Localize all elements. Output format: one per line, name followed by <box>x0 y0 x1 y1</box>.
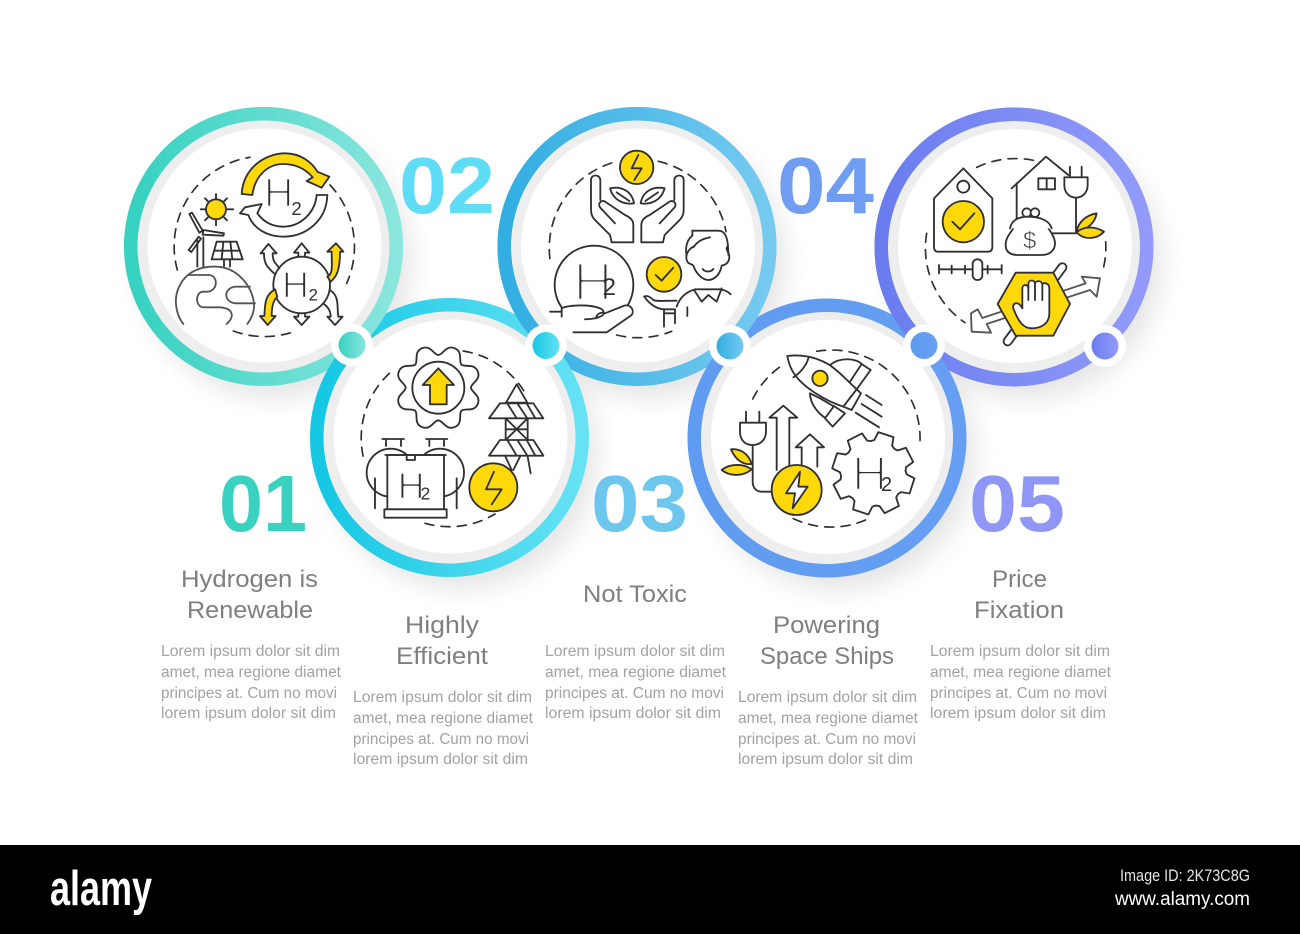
title: Powering Space Ships: Space Ships <box>760 643 894 670</box>
footer bar <box>0 845 1300 934</box>
number 02: 02 <box>399 141 495 230</box>
icon: renewable hydrogen <box>174 153 354 337</box>
text block 4: lorem ipsum dolor sit dim <box>738 751 913 768</box>
icon: price fixation <box>925 157 1106 341</box>
icon: renewable hydrogen: 2 <box>291 198 302 219</box>
text block 5: lorem ipsum dolor sit dim <box>930 705 1106 722</box>
title: Hydrogen is Renewable <box>181 566 318 624</box>
title: Highly Efficient <box>396 612 488 670</box>
icon: highly efficient <box>361 343 543 527</box>
text block 1: lorem ipsum dolor sit dim <box>161 705 336 722</box>
icon: not toxic: 2 <box>603 274 616 301</box>
icon: powering space ships: 2 <box>881 474 892 496</box>
text block 5: principes at. Cum no movi <box>930 685 1107 702</box>
text block 2: principes at. Cum no movi <box>353 731 529 748</box>
title: Powering Space Ships: Powering <box>773 612 880 639</box>
number 03: 03 <box>591 459 688 548</box>
text block 3: lorem ipsum dolor sit dim <box>545 705 721 722</box>
icon: not toxic <box>549 151 731 338</box>
footer logo: alamy <box>50 862 152 916</box>
text block 2: lorem ipsum dolor sit dim <box>353 751 528 768</box>
title: Hydrogen is Renewable: Hydrogen is <box>181 566 318 593</box>
icon: powering space ships <box>722 350 920 527</box>
icon: renewable hydrogen: H <box>264 170 293 216</box>
text block 5: amet, mea regione diamet <box>930 664 1112 681</box>
text block 5: Lorem ipsum dolor sit dim <box>930 643 1110 660</box>
text block 1: amet, mea regione diamet <box>161 664 342 681</box>
text block 1: Lorem ipsum dolor sit dim <box>161 643 340 660</box>
text block 3 <box>545 643 727 722</box>
title: Highly Efficient: Highly <box>405 612 479 639</box>
title: Price Fixation: Price <box>992 566 1047 593</box>
footer image id: Image ID: 2K73C8G <box>1120 866 1250 885</box>
title: Hydrogen is Renewable: Renewable <box>187 597 313 624</box>
text block 1: principes at. Cum no movi <box>161 685 337 702</box>
text block 2 <box>353 689 534 768</box>
text block 3: amet, mea regione diamet <box>545 664 727 681</box>
title: Price Fixation <box>974 566 1064 624</box>
number 05: 05 <box>969 459 1065 548</box>
icon: price fixation: $ <box>1023 227 1036 254</box>
text block 4: principes at. Cum no movi <box>738 731 916 748</box>
text block 5 <box>930 643 1112 722</box>
title: Not Toxic: Not Toxic <box>583 581 687 608</box>
footer url: www.alamy.com <box>1114 889 1250 910</box>
icon: highly efficient: 2 <box>421 483 430 503</box>
text block 4 <box>738 689 919 768</box>
icon: powering space ships: H <box>852 447 887 501</box>
text block 4: amet, mea regione diamet <box>738 710 919 727</box>
icon: renewable hydrogen: 2 <box>309 286 318 305</box>
icon: not toxic: H <box>573 252 612 312</box>
title: Price Fixation: Fixation <box>974 597 1064 624</box>
title: Highly Efficient: Efficient <box>396 643 488 670</box>
soft circle shadows <box>139 126 1162 590</box>
number 04: 04 <box>777 141 875 230</box>
connector dots <box>331 324 1126 367</box>
number 01: 01 <box>219 459 307 548</box>
text block 2: amet, mea regione diamet <box>353 710 534 727</box>
text block 3: Lorem ipsum dolor sit dim <box>545 643 725 660</box>
text block 1 <box>161 643 342 722</box>
text block 2: Lorem ipsum dolor sit dim <box>353 689 532 706</box>
interlocked circle rings <box>131 114 1147 571</box>
icon: highly efficient: H <box>398 465 425 507</box>
title: Powering Space Ships <box>760 612 894 670</box>
text block 4: Lorem ipsum dolor sit dim <box>738 689 917 706</box>
icon: renewable hydrogen: H <box>282 263 309 305</box>
text block 3: principes at. Cum no movi <box>545 685 724 702</box>
